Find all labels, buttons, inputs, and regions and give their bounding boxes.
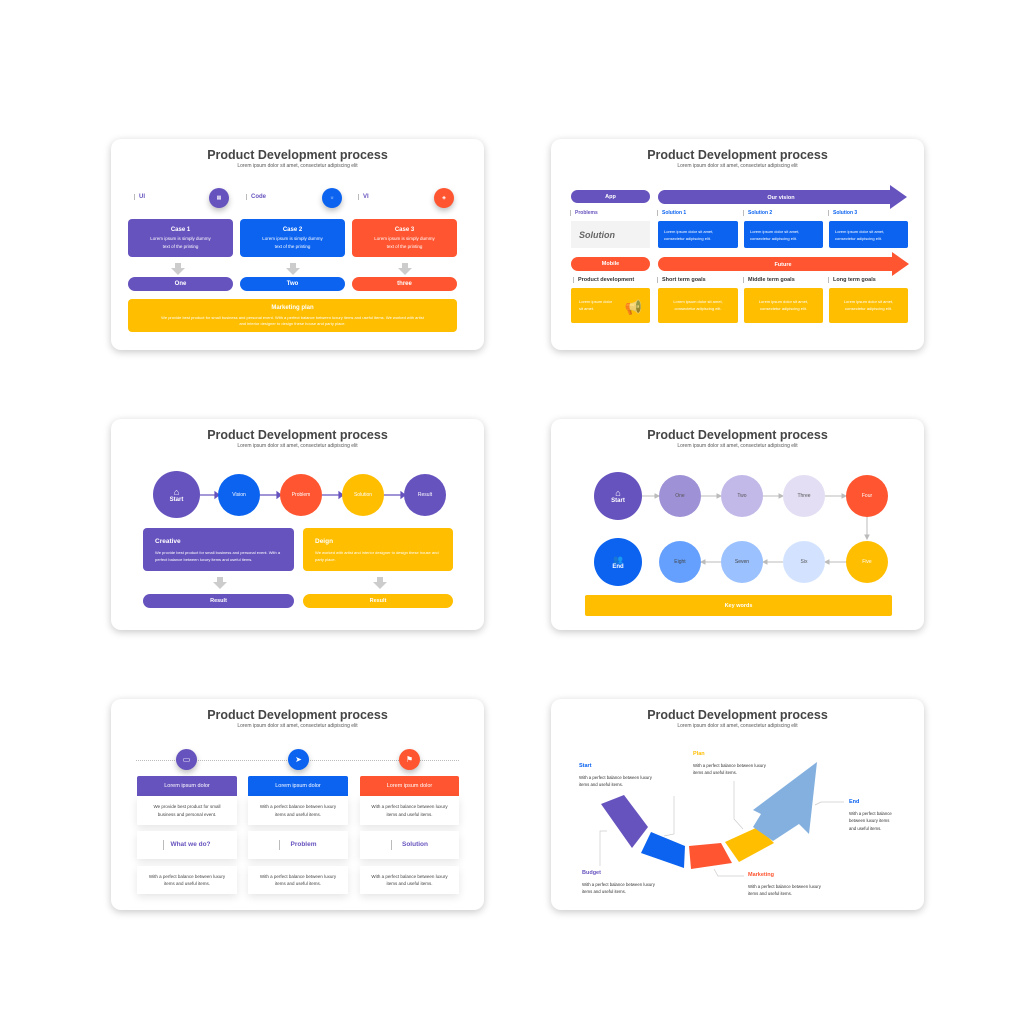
text start: With a perfect balance between luxury: [579, 775, 652, 780]
text end: and useful items.: [849, 826, 881, 831]
col3 bottom text: [360, 866, 459, 894]
design box: [303, 528, 453, 571]
circle one: One: [675, 493, 685, 499]
pill one: One: [175, 281, 186, 287]
icon: send: [288, 749, 309, 770]
blue box 1: [658, 221, 738, 248]
label solution 1: Solution 1: [662, 210, 686, 216]
arrow 3: [398, 263, 412, 275]
subtitle: Lorem ipsum dolor sit amet, consectetur adipiscing elit: [237, 163, 358, 169]
text budget: [582, 882, 655, 894]
blue box 1: Lorem ipsum dolor sit amet,: [664, 229, 713, 234]
col2 text: [248, 796, 348, 825]
column 1 header: [137, 776, 237, 796]
pill mobile: Mobile: [602, 261, 619, 267]
box case 2: Lorem ipsum is simply dummy: [262, 236, 323, 241]
marketing plan: and interior designer to design these house and party place.: [239, 321, 346, 326]
column 2 header: Lorem ipsum dolor: [275, 783, 321, 789]
col1 bottom text: items and useful items.: [164, 881, 210, 886]
title: Product Development process: [647, 708, 828, 722]
design box: We worked with artist and interior designer to design these house and party place.: [315, 550, 439, 562]
pill result 2: [303, 594, 453, 608]
box case 3: text of the printing: [387, 244, 422, 249]
arrow future: Future: [774, 262, 792, 268]
title: Product Development process: [647, 428, 828, 442]
solution box: Solution: [579, 230, 615, 240]
circle four: [846, 475, 888, 517]
box case 2: [240, 219, 345, 257]
title: Product Development process: [207, 428, 388, 442]
box case 3: [352, 219, 457, 257]
yellow box 1: consectetur adipiscing elit.: [675, 306, 721, 310]
circle seven: Seven: [735, 559, 749, 565]
pill app: [571, 190, 650, 203]
label short term: Short term goals: [662, 277, 706, 283]
yellow box 0 with megaphone: Lorem ipsum dolor: [579, 299, 612, 304]
circle problem: Problem: [292, 492, 310, 498]
circle six: [783, 541, 825, 583]
circle problem: [280, 474, 322, 516]
text start: items and useful items.: [579, 782, 623, 787]
blue box 1: consectetur adipiscing elit.: [664, 236, 711, 241]
label solution 2: Solution 2: [748, 210, 772, 216]
circle four: Four: [862, 493, 872, 499]
marketing plan: We provide best product for small business and personal event. With a perfect balance between luxury items and useful items. We worked with artist: [161, 315, 424, 320]
text start: [579, 775, 652, 787]
box case 3: Lorem ipsum is simply dummy: [374, 236, 435, 241]
circle vision: Vision: [232, 492, 246, 498]
text marketing: [748, 884, 821, 896]
label marketing: Marketing: [748, 872, 774, 878]
title: Product Development process: [647, 148, 828, 162]
pill two: [240, 277, 345, 291]
label end: End: [849, 799, 859, 805]
arrow 1: [171, 263, 185, 275]
blue box 2: consectetur adipiscing elit.: [750, 236, 797, 241]
box case 2: Case 2: [283, 227, 302, 233]
text plan: [693, 763, 766, 775]
label plan: Plan: [693, 751, 705, 757]
subtitle: Lorem ipsum dolor sit amet, consectetur adipiscing elit: [237, 443, 358, 449]
label VI: VI: [363, 194, 369, 200]
circle start: ⌂: [174, 486, 179, 496]
box case 2: text of the printing: [275, 244, 310, 249]
col3 text: With a perfect balance between luxury: [371, 804, 448, 809]
segment red: [689, 843, 732, 869]
icon: calendar: ▦: [217, 195, 221, 201]
icon: bulb: [322, 188, 342, 208]
col1 bottom text: With a perfect balance between luxury: [149, 874, 225, 879]
arrow our vision: [658, 185, 907, 209]
yellow box 2: consectetur adipiscing elit.: [760, 306, 807, 310]
circle eight: Eight: [674, 559, 686, 565]
pill app: App: [605, 194, 616, 200]
col2 bottom text: items and useful items.: [275, 881, 321, 886]
blue box 2: Lorem ipsum dolor sit amet,: [750, 229, 799, 234]
circle start: Start: [611, 498, 625, 504]
panel: card 5 columns: [111, 699, 484, 910]
circle six: Six: [801, 559, 807, 565]
circle vision: [218, 474, 260, 516]
text end: between luxury items: [849, 818, 889, 823]
panel: card 6 curved arrow: [551, 699, 924, 910]
text budget: items and useful items.: [582, 889, 626, 894]
label middle term: Middle term goals: [748, 277, 795, 283]
circle one: [659, 475, 701, 517]
col2 text: items and useful items.: [275, 812, 321, 816]
icon: tag: ◈: [442, 195, 446, 201]
design box: Deign: [315, 538, 333, 545]
circle three: Three: [797, 493, 811, 499]
column 1 header: Lorem ipsum dolor: [164, 783, 210, 789]
yellow box 3: consectetur adipiscing elit.: [845, 306, 892, 310]
icon: monitor: [176, 749, 197, 770]
creative box: Creative: [155, 538, 181, 545]
pill three: [352, 277, 457, 291]
arrow down 2: [373, 577, 387, 589]
circle start: [153, 471, 200, 518]
icon: calendar: [209, 188, 229, 208]
text plan: With a perfect balance between luxury: [693, 763, 766, 768]
box case 1: Lorem ipsum is simply dummy: [150, 236, 211, 241]
box case 1: Case 1: [171, 227, 190, 233]
yellow box 0 with megaphone: 📢: [625, 299, 642, 315]
key words bar: [585, 595, 892, 616]
arrow head: [753, 762, 817, 841]
circle end: 👥: [613, 554, 623, 564]
segment yellow: [725, 827, 774, 862]
col1 text: business and personal event.: [158, 812, 216, 816]
label start: Start: [579, 763, 592, 769]
panel: card 3 flow circles: [111, 419, 484, 630]
segment purple: [601, 795, 648, 848]
col1 text: We provide best product for small: [154, 804, 220, 809]
creative box: [143, 528, 294, 571]
connector arrows: [200, 490, 404, 500]
solution: Solution: [402, 841, 428, 848]
pill result 1: Result: [210, 598, 227, 604]
col1 text: [137, 796, 237, 825]
text marketing: With a perfect balance between luxury: [748, 884, 821, 889]
connectors: [642, 493, 870, 565]
icon: monitor: ▭: [183, 755, 190, 764]
marketing plan: [128, 299, 457, 332]
circle five: Five: [862, 559, 872, 565]
text budget: With a perfect balance between luxury: [582, 882, 655, 887]
chart: curved arrow: [600, 762, 844, 876]
circle five: [846, 541, 888, 583]
box case 3: Case 3: [395, 227, 414, 233]
column 2 header: [248, 776, 348, 796]
subtitle: Lorem ipsum dolor sit amet, consectetur adipiscing elit: [237, 723, 358, 729]
what we do: [137, 831, 237, 859]
what we do: What we do?: [170, 841, 211, 848]
pill mobile: [571, 257, 650, 271]
circle three: [783, 475, 825, 517]
text end: With a perfect balance: [849, 811, 892, 816]
box case 1: [128, 219, 233, 257]
yellow box 0 with megaphone: sit amet.: [579, 306, 594, 311]
arrow our vision: Our vision: [767, 195, 795, 201]
segment blue: [641, 832, 685, 868]
pill three: three: [397, 281, 412, 287]
circle start: Start: [170, 496, 183, 502]
icon: bulb: ☼: [330, 195, 334, 201]
icon: flag: [399, 749, 420, 770]
label solution 3: Solution 3: [833, 210, 857, 216]
subtitle: Lorem ipsum dolor sit amet, consectetur adipiscing elit: [677, 443, 798, 449]
marketing plan: Marketing plan: [271, 305, 314, 311]
arrow future: [658, 252, 909, 276]
label problems: Problems: [575, 210, 598, 216]
key words bar: Key words: [725, 602, 752, 608]
column 3 header: Lorem ipsum dolor: [387, 783, 432, 789]
blue box 2: [744, 221, 823, 248]
col3 bottom text: items and useful items.: [386, 881, 432, 886]
circle end: [594, 538, 642, 586]
circle end: End: [612, 564, 624, 570]
blue box 3: [829, 221, 908, 248]
pill two: Two: [287, 281, 298, 287]
col3 bottom text: With a perfect balance between luxury: [371, 874, 448, 879]
panel: card 1 cases: [111, 139, 484, 350]
yellow box 1: [658, 288, 738, 323]
pill result 2: Result: [370, 598, 386, 604]
circle seven: [721, 541, 763, 583]
panel: card 4 snake flow: [551, 419, 924, 630]
yellow box 1: Lorem ipsum dolor sit amet,: [673, 299, 723, 304]
label UI: UI: [139, 194, 145, 200]
solution box: [571, 221, 650, 248]
label budget: Budget: [582, 870, 601, 876]
label long term: Long term goals: [833, 277, 876, 283]
col2 bottom text: [248, 866, 348, 894]
col2 text: With a perfect balance between luxury: [260, 804, 336, 809]
col3 text: [360, 796, 459, 825]
yellow box 3: Lorem ipsum dolor sit amet,: [844, 299, 893, 304]
creative box: We provide best product for small business and personal event. With a perfect balance between luxury items and useful items.: [155, 550, 280, 562]
text plan: items and useful items.: [693, 770, 737, 775]
problem: [248, 831, 348, 859]
box case 1: text of the printing: [163, 244, 198, 249]
col2 bottom text: With a perfect balance between luxury: [260, 874, 336, 879]
yellow box 2: [744, 288, 823, 323]
icon: send: ➤: [295, 755, 302, 764]
col1 bottom text: [137, 866, 237, 894]
icon: tag: [434, 188, 454, 208]
blue box 3: consectetur adipiscing elit.: [835, 236, 882, 241]
circle eight: [659, 541, 701, 583]
arrow 2: [286, 263, 300, 275]
title: Product Development process: [207, 148, 388, 162]
panel: card 2 vision: [551, 139, 924, 350]
pill one: [128, 277, 233, 291]
circle solution: Solution: [354, 492, 372, 498]
problem: Problem: [290, 841, 316, 848]
label VI: [358, 194, 369, 200]
label product development: Product development: [578, 277, 634, 283]
icon: flag: ⚑: [406, 755, 413, 764]
blue box 3: Lorem ipsum dolor sit amet,: [835, 229, 884, 234]
yellow box 3: [829, 288, 908, 323]
label UI: [134, 194, 145, 200]
circle two: Two: [737, 493, 747, 499]
pill result 1: [143, 594, 294, 608]
circle result: Result: [418, 492, 432, 498]
yellow box 0 with megaphone: [571, 288, 650, 323]
circle start: [594, 472, 642, 520]
column 3 header: [360, 776, 459, 796]
subtitle: Lorem ipsum dolor sit amet, consectetur adipiscing elit: [677, 163, 798, 169]
circle two: [721, 475, 763, 517]
text marketing: items and useful items.: [748, 891, 792, 896]
label Code: Code: [251, 194, 266, 200]
circle result: [404, 474, 446, 516]
arrow down 1: [213, 577, 227, 589]
text end: [849, 811, 892, 831]
title: Product Development process: [207, 708, 388, 722]
circle start: ⌂: [615, 488, 621, 498]
solution: [360, 831, 459, 859]
circle solution: [342, 474, 384, 516]
yellow box 2: Lorem ipsum dolor sit amet,: [759, 299, 808, 304]
subtitle: Lorem ipsum dolor sit amet, consectetur adipiscing elit: [677, 723, 798, 729]
col3 text: items and useful items.: [386, 812, 432, 816]
